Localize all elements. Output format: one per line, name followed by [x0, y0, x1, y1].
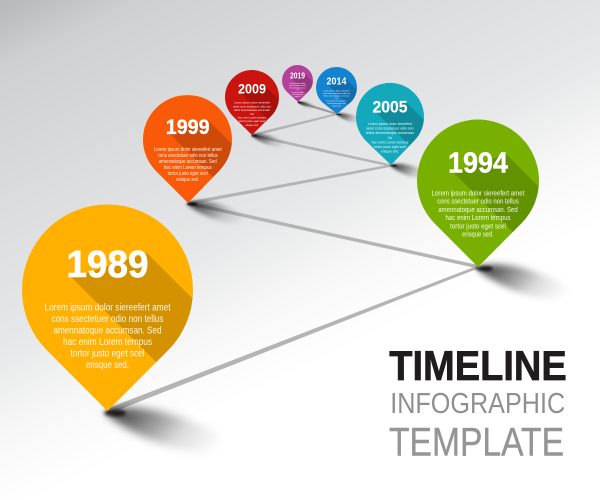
pin: 1994: [417, 120, 539, 267]
body text: Lorem ipsum dolor siereefert: [368, 122, 413, 126]
body text: Sed: [388, 136, 392, 140]
body text: amet cons ssectetuer odio non: [366, 127, 414, 131]
body text: erisque sed.: [294, 95, 301, 98]
year: 2009: [238, 81, 266, 97]
body text: tellus amennatoque accumsan: [324, 94, 350, 97]
body text: hac enim Lorem tempus: [446, 215, 511, 222]
body text: [432, 190, 524, 238]
body text: cons ssectetuer odio non tellus: [437, 199, 519, 206]
title line: INFOGRAPHIC: INFOGRAPHIC: [390, 388, 565, 420]
year: 2014: [326, 76, 347, 87]
body text: Sed: [297, 90, 298, 92]
year: 2019: [290, 72, 305, 81]
body text: erisque sed.: [332, 104, 341, 107]
title line: TEMPLATE: TEMPLATE: [389, 421, 564, 465]
body text: cons ssectetuer odio non tellus: [52, 314, 164, 325]
body text: erisque sed.: [246, 123, 259, 127]
body text: Sed: [250, 112, 254, 116]
body text: Lorem ipsum dolor siereefert amet: [432, 190, 524, 198]
body text: amet cons ssectetuer odio non: [323, 92, 351, 95]
body text: [44, 303, 171, 371]
body text: erisque sed.: [176, 177, 199, 183]
pin: 1989: [22, 204, 193, 411]
body text: Lorem ipsum dolor siereefert: [290, 82, 306, 85]
title line: TIMELINE: TIMELINE: [389, 342, 567, 389]
body text: erisque sed.: [462, 232, 494, 238]
body text: tortor justo eget scel: [70, 349, 144, 360]
body text: [323, 89, 351, 107]
body text: hac enim Lorem tempus: [372, 140, 409, 144]
body text: amet cons ssectetuer odio non: [289, 84, 306, 87]
body text: tortor justo eget scel: [328, 102, 346, 105]
body text: Lorem ipsum dolor siereefert: [324, 89, 350, 92]
year: 1989: [66, 244, 148, 286]
pin ground shadows: [104, 102, 583, 453]
body text: tellus amennatoque accumsan: [290, 86, 306, 89]
body text: amennatoque accumsan. Sed: [159, 159, 217, 165]
body text: tortor justo eget scel: [168, 171, 208, 177]
body text: cons ssectetuer odio non tellus: [158, 153, 218, 159]
pin: 2005: [356, 82, 424, 165]
body text: tellus amennatoque accumsan: [234, 108, 270, 112]
body text: [366, 122, 414, 154]
body text: hac enim Lorem tempus: [292, 91, 304, 94]
pin: 2014: [316, 67, 357, 114]
body text: Lorem ipsum dolor siereefert amet: [154, 147, 222, 153]
body text: tortor justo eget scel: [239, 119, 265, 123]
body text: tellus amennatoque accumsan: [366, 131, 414, 135]
body text: Sed: [335, 98, 338, 100]
body text: Lorem ipsum dolor siereefert: [234, 101, 270, 105]
body text: erisque sed.: [381, 150, 399, 154]
body text: tortor justo eget scel: [450, 223, 506, 230]
body text: hac enim Lorem tempus: [326, 99, 346, 102]
pin: 1999: [143, 95, 232, 203]
year: 1999: [166, 116, 210, 139]
body text: hac enim Lorem tempus: [238, 116, 267, 120]
body text: Lorem ipsum dolor siereefert amet: [44, 303, 171, 314]
title block: [389, 342, 567, 465]
body text: amennatoque accumsan. Sed: [438, 207, 518, 214]
body text: tortor justo eget scel: [292, 93, 303, 96]
body text: hac enim Lorem tempus: [63, 337, 152, 348]
year: 1994: [448, 148, 508, 180]
timeline connector lines: [106, 101, 478, 414]
body text: hac enim Lorem tempus: [164, 165, 212, 171]
body text: [233, 101, 271, 127]
pin: 2019: [282, 65, 313, 102]
body text: [289, 82, 306, 98]
pin: 2009: [225, 70, 279, 135]
year: 2005: [372, 98, 408, 117]
body text: [154, 147, 222, 183]
body text: amet cons ssectetuer odio non: [233, 104, 271, 108]
body text: erisque sed.: [86, 360, 129, 371]
body text: amennatoque accumsan. Sed: [54, 326, 162, 337]
body text: tortor justo eget scel: [374, 145, 406, 149]
